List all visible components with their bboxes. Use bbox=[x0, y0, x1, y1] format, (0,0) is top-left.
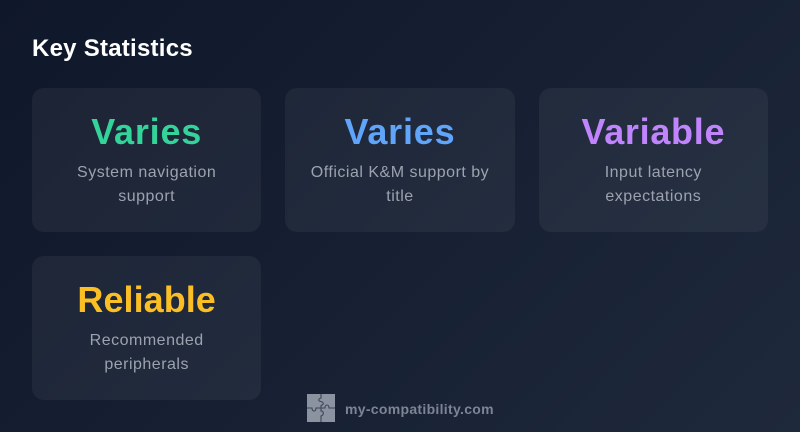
stat value: Varies bbox=[345, 111, 455, 152]
panel: input latency expectations bbox=[539, 88, 768, 232]
stat label: peripherals bbox=[104, 356, 189, 373]
stat label: title bbox=[386, 188, 414, 205]
stat label bbox=[605, 164, 702, 205]
footer brand bbox=[307, 394, 494, 422]
stat value: Reliable bbox=[77, 279, 216, 320]
stat label: Recommended bbox=[90, 332, 204, 349]
panel: recommended peripherals bbox=[32, 256, 261, 400]
stat label bbox=[311, 164, 489, 205]
site name: my-compatibility.com bbox=[345, 401, 494, 417]
stat value: Varies bbox=[91, 111, 202, 152]
stat label bbox=[77, 164, 216, 205]
stat label bbox=[90, 332, 204, 373]
icon: puzzle logo bbox=[307, 394, 335, 422]
stat label: System navigation bbox=[77, 164, 216, 181]
stat label: Official K&M support by bbox=[311, 164, 489, 181]
panel: system navigation support bbox=[32, 88, 261, 232]
stat label: support bbox=[118, 188, 175, 205]
panel: official K&M support bbox=[285, 88, 515, 232]
stat label: expectations bbox=[605, 188, 701, 205]
stat value: Variable bbox=[581, 111, 725, 152]
stat label: Input latency bbox=[605, 164, 702, 181]
title: Key Statistics bbox=[32, 35, 193, 62]
